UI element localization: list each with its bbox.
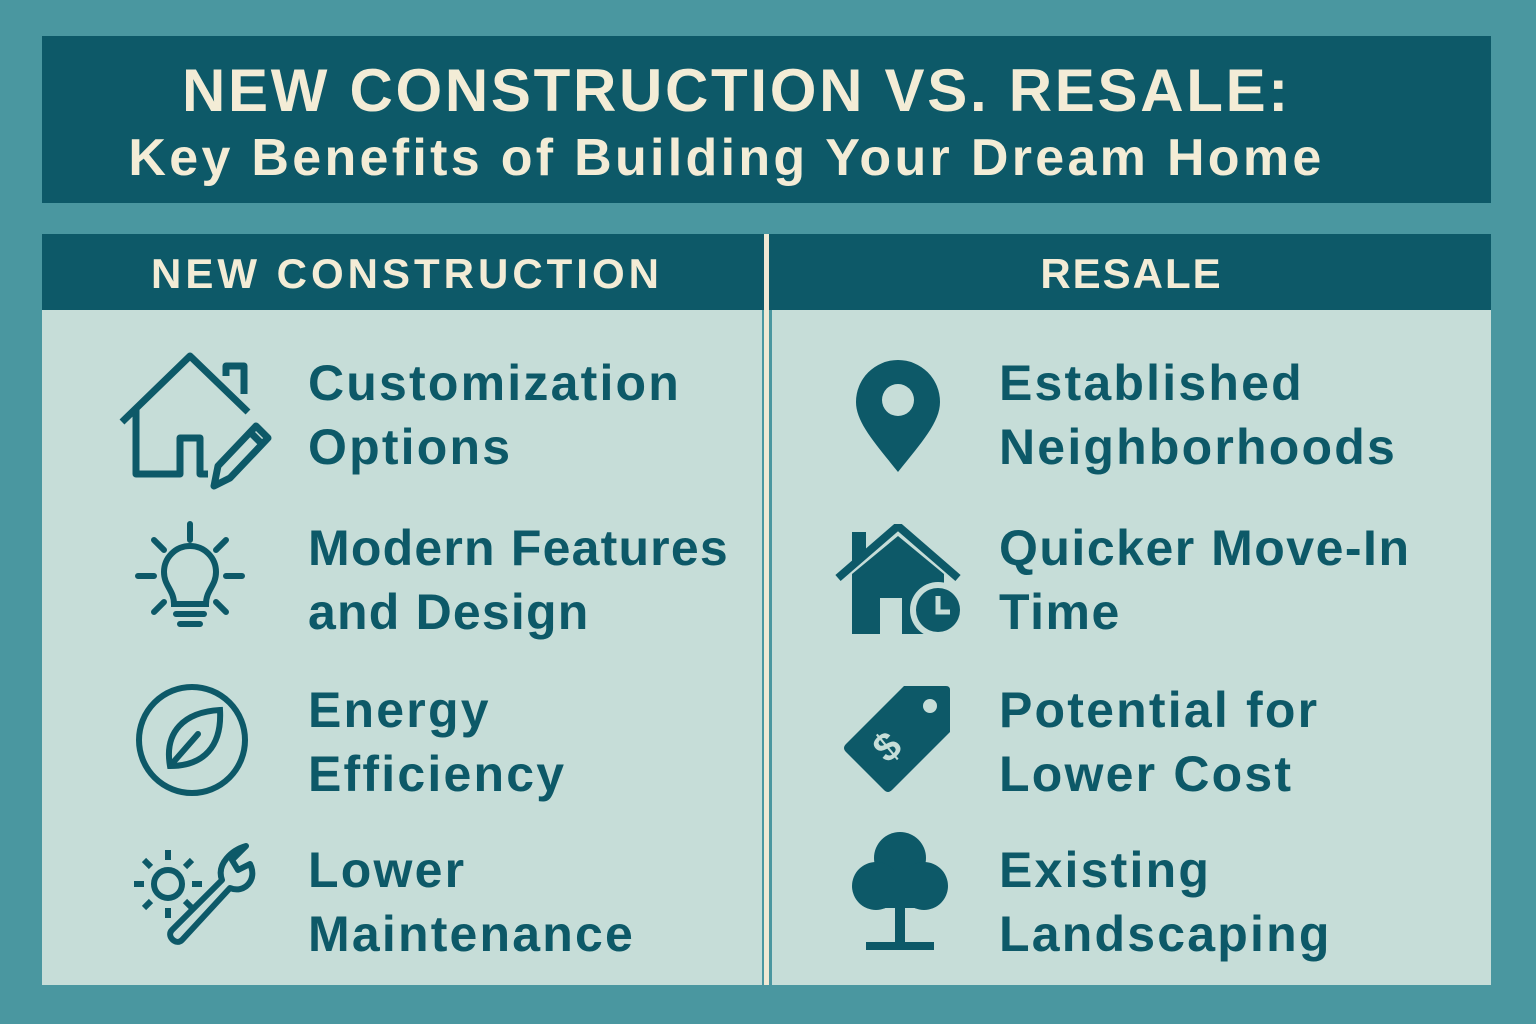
text: lower cost: Potential for	[999, 682, 1319, 738]
subtitle: Key Benefits of Building Your Dream Home	[128, 129, 1325, 187]
panel: resale	[772, 234, 1491, 985]
text: lower maintenance: Maintenance	[308, 906, 635, 962]
icon: leaf circle	[136, 684, 248, 796]
text: modern features	[308, 520, 729, 640]
text: lower cost	[999, 682, 1319, 802]
title line 1: NEW CONSTRUCTION VS. RESALE:	[182, 57, 1291, 124]
text: modern features: Modern Features	[308, 520, 729, 576]
text: quicker move-in: Quicker Move-In	[999, 520, 1410, 576]
divider	[764, 234, 769, 985]
icon: house with pencil	[120, 352, 272, 490]
text: existing landscaping	[999, 842, 1332, 962]
text: customization options: Options	[308, 419, 512, 475]
text: lower maintenance	[308, 842, 635, 962]
text: energy efficiency: Energy	[308, 682, 491, 738]
text: existing landscaping: Existing	[999, 842, 1211, 898]
header: resale	[772, 234, 1491, 310]
icon: price tag	[844, 686, 950, 792]
icon: house with clock	[836, 524, 960, 634]
panel: new construction	[42, 234, 762, 985]
text: quicker move-in: Time	[999, 584, 1121, 640]
text: customization options	[308, 355, 681, 475]
text: customization options: Customization	[308, 355, 681, 411]
icon: lightbulb	[135, 521, 245, 627]
text: modern features: and Design	[308, 584, 589, 640]
icon: location pin	[856, 360, 940, 472]
text: established neighborhoods	[999, 355, 1397, 475]
header: new construction: NEW CONSTRUCTION	[151, 250, 663, 297]
text: energy efficiency	[308, 682, 566, 802]
text: established neighborhoods: Neighborhoods	[999, 419, 1397, 475]
icon: price tag: $	[865, 723, 910, 771]
text: quicker move-in	[999, 520, 1410, 640]
text: energy efficiency: Efficiency	[308, 746, 566, 802]
icon: gear and wrench	[134, 843, 256, 945]
header: new construction	[42, 234, 772, 310]
text: lower cost: Lower Cost	[999, 746, 1293, 802]
text: established neighborhoods: Established	[999, 355, 1304, 411]
icon: tree	[852, 832, 948, 950]
text: existing landscaping: Landscaping	[999, 906, 1332, 962]
header: resale: RESALE	[1040, 250, 1223, 297]
title banner	[42, 36, 1491, 203]
text: lower maintenance: Lower	[308, 842, 466, 898]
